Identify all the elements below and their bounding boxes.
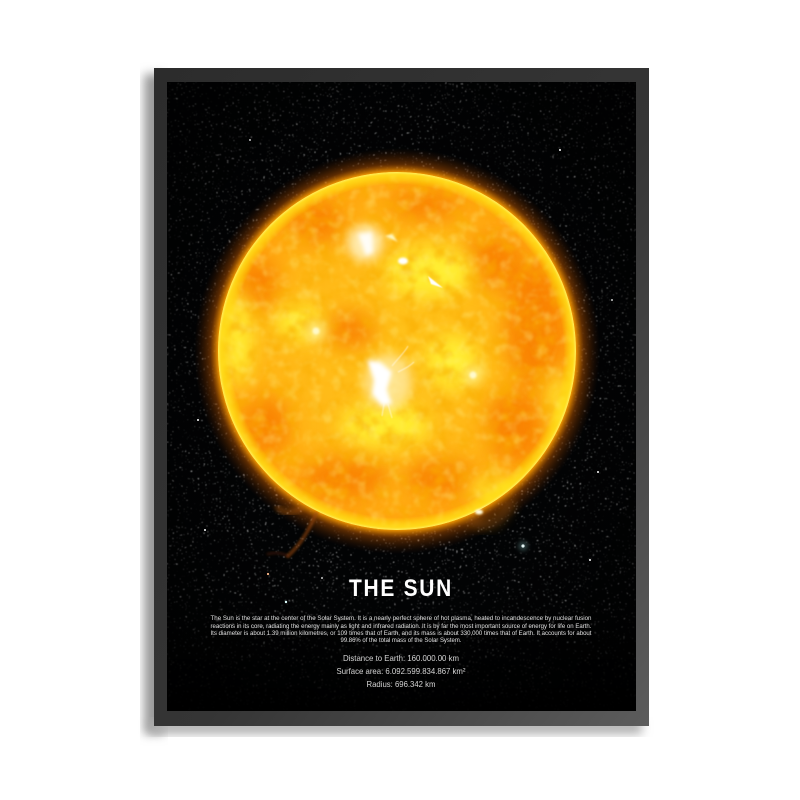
solar glow: [194, 148, 600, 554]
sun base colour: [218, 172, 576, 530]
planet facts: Surface area: 6.092.599.834.867 km²: [336, 666, 466, 676]
description text: 99.86% of the total mass of the Solar System.: [340, 637, 462, 644]
description text: [210, 615, 592, 644]
description text: The Sun is the star at the center of the Solar System. It is a nearly perfect sphere of hot plasma, heated to incandescence by nuclear fusion: [210, 615, 592, 622]
planet facts: Distance to Earth: 160.000.00 km: [343, 653, 459, 663]
poster artwork: [167, 82, 636, 711]
space background: [167, 82, 636, 711]
planet facts: [336, 655, 466, 687]
frame drop shadow: [144, 74, 642, 734]
description text: Its diameter is about 1.39 million kilometres, or 109 times that of Earth, and its mass is about 330,000 times that of Earth. It accounts for about: [210, 630, 592, 637]
bright limb: [218, 172, 576, 530]
title: THE SUN: [349, 575, 453, 602]
solar prominence: [268, 505, 510, 556]
flare at lower limb: [475, 510, 483, 514]
description text: reactions in its core, radiating the energy mainly as light and infrared radiation. It is by far the most important source of energy for life on Earth.: [210, 623, 592, 630]
white flare regions: [305, 225, 497, 519]
picture frame: [154, 68, 649, 726]
starfield: [167, 82, 636, 711]
sun disc: [218, 172, 576, 530]
planet facts: Radius: 696.342 km: [366, 679, 436, 689]
orange surface patches: [238, 191, 565, 498]
granulation texture: [223, 185, 560, 518]
yellow surface patches: [222, 246, 567, 502]
